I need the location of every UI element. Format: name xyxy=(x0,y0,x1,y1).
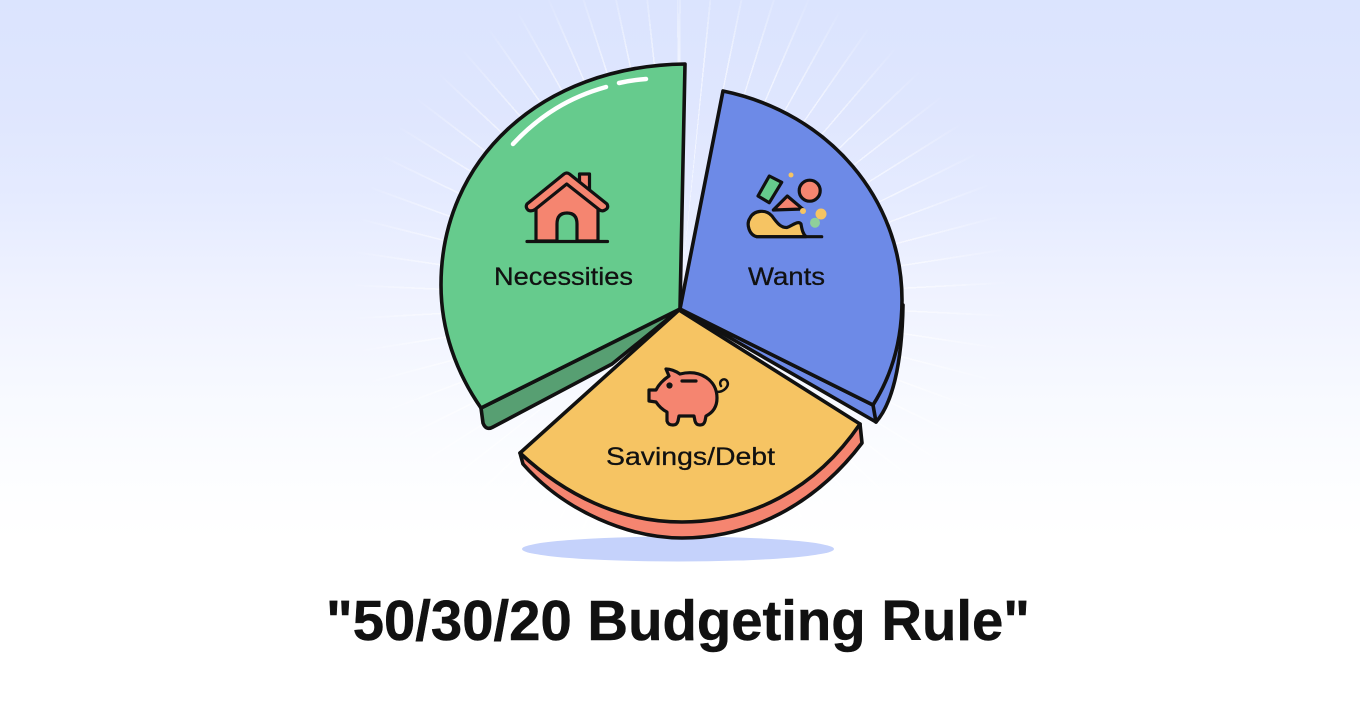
icon: house xyxy=(526,173,608,242)
green slice side edge xyxy=(481,309,680,428)
icon: assorted wants shapes xyxy=(748,172,826,237)
icon: piggy bank xyxy=(649,369,728,425)
ground shadow xyxy=(522,536,834,562)
gloss highlight xyxy=(513,79,646,144)
blue slice top xyxy=(680,91,902,405)
label: Necessities: Necessities xyxy=(494,263,633,291)
title: "50/30/20 Budgeting Rule" xyxy=(326,589,1030,653)
label: Savings/Debt: Savings/Debt xyxy=(606,443,775,471)
green slice top xyxy=(441,64,685,408)
panel: Savings/Debt slice xyxy=(520,310,862,538)
yellow slice side edge xyxy=(520,424,862,538)
blue slice side edge xyxy=(680,305,903,422)
panel: Necessities slice xyxy=(441,64,685,428)
yellow slice top xyxy=(520,310,860,522)
sunburst rays xyxy=(417,6,943,290)
panel: Wants slice xyxy=(680,91,903,422)
blue slice corner edge xyxy=(873,405,876,422)
label: Wants: Wants xyxy=(748,263,825,291)
